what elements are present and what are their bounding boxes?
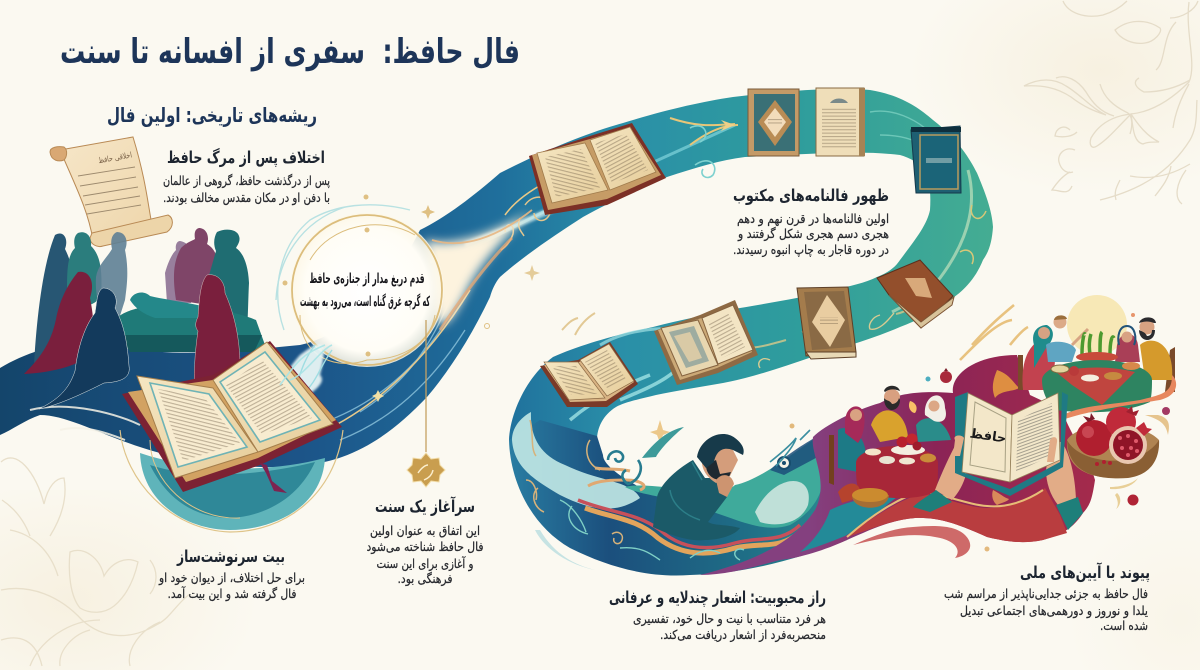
text block: dispute after Hafez's death: اختلاف پس از مرگ حافظ — [167, 148, 325, 168]
text block: written fal-books: در دوره قاجار به چاپ انبوه رسیدند. — [733, 242, 889, 258]
text block: written fal-books: اولین فالنامه‌ها در قرن نهم و دهم — [737, 211, 889, 227]
text block: written fal-books: ظهور فالنامه‌های مکتوب — [733, 186, 889, 206]
hands holding hafez book: حافظ — [969, 427, 1007, 446]
text block: dispute after Hafez's death: پس از درگذشت حافظ، گروهی از عالمان — [163, 173, 330, 189]
family at yalda table — [829, 386, 951, 508]
text block: link with national rituals — [944, 561, 1150, 633]
text block: fateful verse: بیت سرنوشت‌ساز — [176, 547, 285, 567]
text block: link with national rituals: شده است. — [1100, 618, 1148, 633]
book 1 on ribbon — [529, 123, 666, 215]
quote text — [300, 271, 430, 310]
teal halo under large book — [120, 430, 343, 532]
text block: fateful verse: برای حل اختلاف، از دیوان خود او — [158, 570, 305, 586]
scroll — [50, 137, 172, 247]
floral line art: top right — [1024, 1, 1198, 204]
hanging medallion — [407, 320, 445, 487]
floral line art: bottom left — [1, 458, 190, 666]
text block: start of a tradition: فرهنگی بود. — [398, 571, 453, 587]
text block: fateful verse — [158, 547, 305, 602]
text block: dispute after Hafez's death — [163, 148, 330, 206]
text: که گرچه غرق گناه است، می‌رود به بهشت — [300, 293, 430, 310]
quote halo: swoosh and arcs around poem — [276, 194, 540, 411]
scroll: اخلاقی حافظ — [98, 150, 133, 165]
quote text: قدم دریغ مدار از جنازه‌ی حافظ — [310, 271, 424, 287]
books 2: cover and title page — [748, 88, 865, 156]
main flowing ribbon — [0, 89, 993, 480]
text block: link with national rituals: پیوند با آیین‌های ملی — [1020, 561, 1150, 583]
book 6: open — [654, 300, 758, 385]
text block: start of a tradition: این اتفاق به عنوان اولین — [370, 523, 480, 539]
text block: written fal-books: هجری دسم هجری شکل گرفتند و — [737, 226, 889, 242]
text block: link with national rituals: یلدا و نوروز و دورهمی‌های اجتماعی تبدیل — [960, 603, 1148, 619]
large open book — [122, 341, 342, 493]
text block: secret of popularity: هر فرد متناسب با نیت و حال خود، تفسیری — [633, 611, 826, 627]
text block: link with national rituals: فال حافظ به جزئی جدایی‌ناپذیر از مراسم شب — [944, 586, 1148, 602]
book 5: standing ornate — [797, 287, 856, 359]
family at nowruz table — [1018, 295, 1175, 412]
decorative accents around celebration — [926, 313, 1170, 509]
maroon celebration band — [700, 305, 1095, 575]
ribbon swirls and streaks — [30, 111, 986, 440]
text block: start of a tradition — [366, 495, 484, 587]
lower ribbon: contemplation band — [509, 412, 880, 576]
text block: secret of popularity: راز محبوبیت: اشعار چندلایه و عرفانی — [609, 588, 826, 608]
hands holding hafez book — [913, 392, 1083, 530]
title: فال حافظ: سفری از افسانه تا سنت — [60, 32, 520, 72]
book 3: teal — [911, 126, 961, 193]
man in contemplation — [653, 434, 744, 540]
text block: start of a tradition: سرآغاز یک سنت — [375, 495, 475, 517]
book 7: open — [540, 342, 638, 407]
heading: historical roots: ریشه‌های تاریخی: اولین فال — [107, 103, 317, 127]
pomegranate bowl — [1062, 375, 1176, 478]
text block: start of a tradition: و آغازی برای این سنت — [376, 556, 474, 572]
text block: secret of popularity: منحصربه‌فرد از اشعار دریافت می‌کند. — [660, 627, 826, 643]
text block: written fal-books — [733, 186, 889, 258]
mourners and bier — [24, 228, 265, 409]
text block: fateful verse: فال گرفته شد و این بیت آمد. — [168, 586, 297, 602]
text block: start of a tradition: فال حافظ شناخته می‌شود — [366, 539, 484, 555]
book 4: brown tilted — [877, 260, 954, 328]
text block: secret of popularity — [609, 588, 826, 643]
text block: dispute after Hafez's death: با دفن او در مکان مقدس مخالف بودند. — [163, 190, 330, 206]
floating wisp from book to quote — [280, 345, 332, 385]
